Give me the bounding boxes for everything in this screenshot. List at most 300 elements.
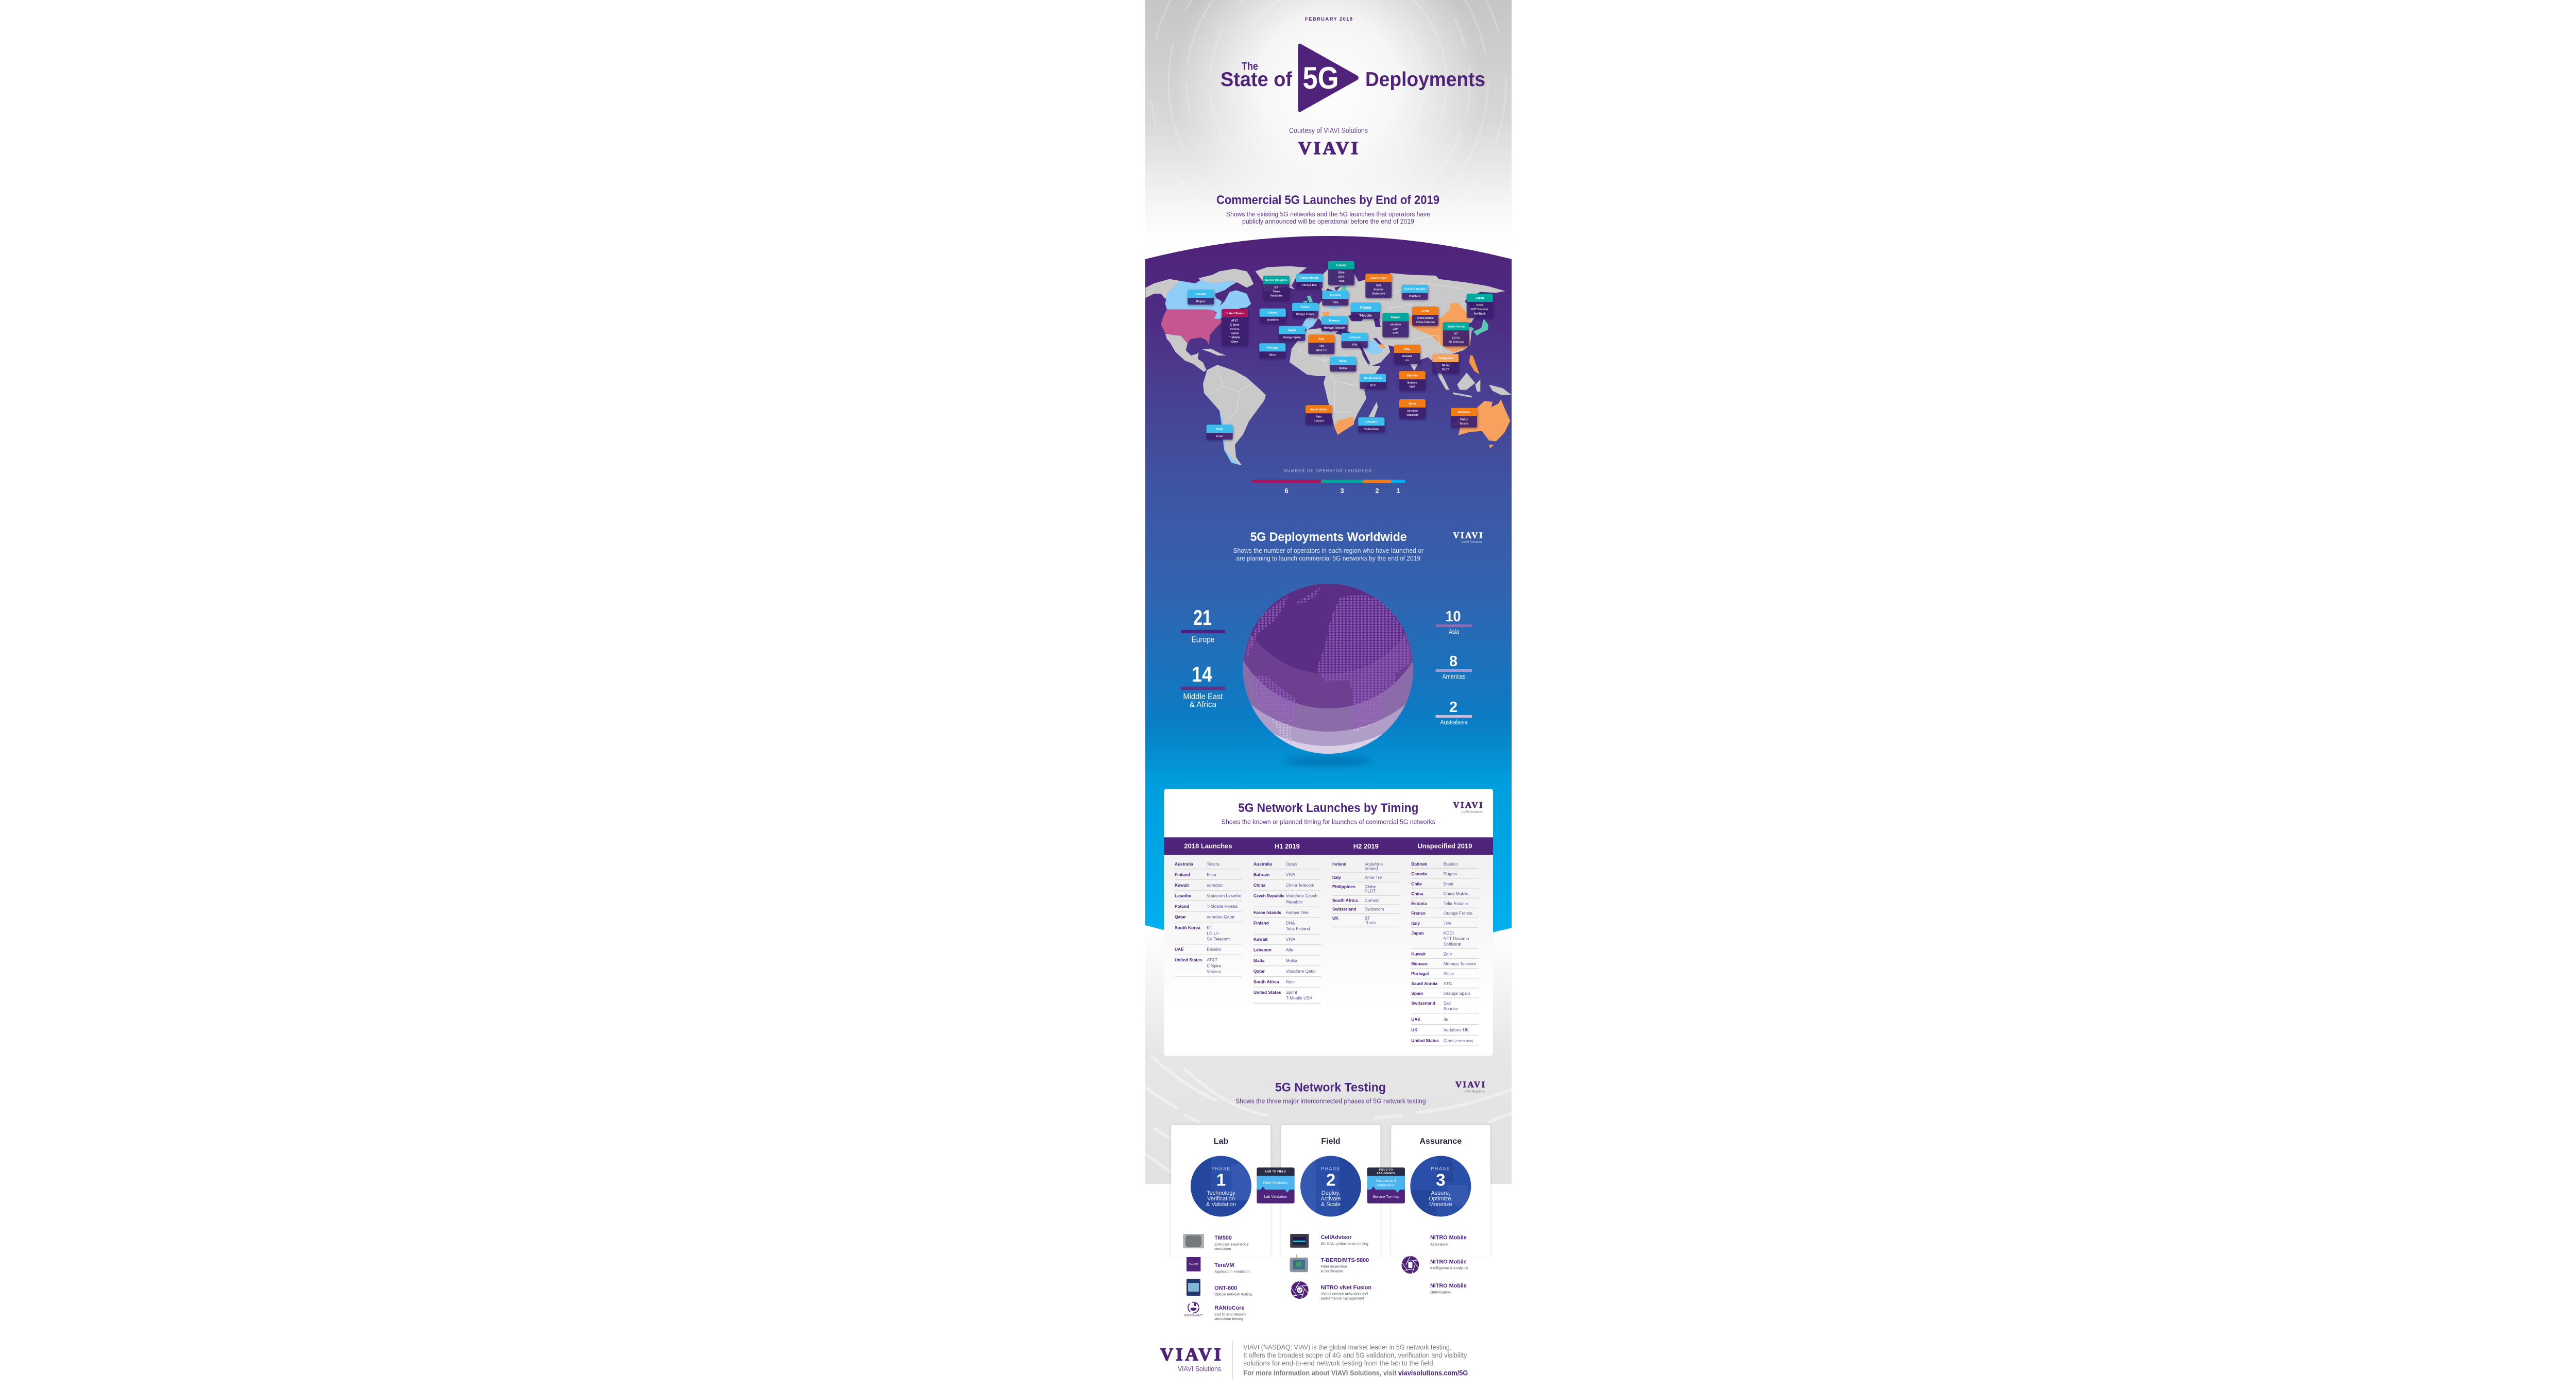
card: Japan — [1467, 294, 1493, 318]
product: NITRO vNet Fusion: performance management — [1321, 1296, 1364, 1300]
column: H2 2019: Three — [1365, 920, 1376, 925]
card: Kuwait — [1382, 313, 1409, 337]
card: Czech Republic — [1402, 285, 1428, 300]
heading: testing: 5G Network Testing — [1275, 1080, 1386, 1094]
phase 2 circle: Activate — [1320, 1196, 1341, 1202]
description: testing: Shows the three major interconnected phases of 5G network testing — [1235, 1097, 1426, 1105]
card: Ireland: Vodafone — [1267, 319, 1279, 322]
panel: lab — [1171, 1125, 1270, 1267]
card: South Korea: LG U+ — [1452, 336, 1460, 340]
column: 2018 launches: Qatar — [1175, 914, 1187, 920]
icon: TM500 device — [1183, 1234, 1204, 1248]
card: UAE: UAE — [1404, 348, 1410, 351]
column: unspecified 2019: Telia Estonia — [1444, 901, 1468, 906]
table header band: Unspecified 2019 — [1417, 842, 1472, 850]
product: TeraVM: TeraVM — [1214, 1262, 1234, 1268]
heading: Lab: Lab — [1214, 1137, 1228, 1146]
column: 2018 launches: LG U+ — [1207, 931, 1219, 936]
card: South Korea: SK Telecom — [1449, 341, 1464, 344]
phase 3 circle — [1410, 1156, 1471, 1218]
column: 2018 launches: Etisalat — [1207, 947, 1221, 952]
stat: Americas 8 — [1436, 653, 1472, 680]
date label: FEBRUARY 2019 — [1305, 16, 1352, 22]
product: RANtoCore: End to end network — [1214, 1312, 1247, 1316]
card: Poland — [1351, 302, 1380, 319]
column: unspecified 2019: Claro (Puerto Rico) — [1444, 1038, 1473, 1043]
column: H1 2019: Lebanon — [1253, 947, 1272, 953]
card: Monaco — [1321, 316, 1348, 331]
map cards — [1188, 261, 1493, 439]
column: 2018 launches: T-Mobile Polska — [1207, 904, 1238, 909]
card: Estonia — [1322, 291, 1348, 306]
card: United States: Claro — [1231, 341, 1238, 344]
stat: Europe 21: 21 — [1193, 605, 1212, 630]
card: Qatar — [1399, 399, 1426, 419]
card: Monaco: Monaco Telecom — [1324, 327, 1345, 330]
product: NITRO Mobile intelligence: NITRO Mobile — [1430, 1259, 1467, 1265]
card: Lesotho: Lesotho — [1366, 420, 1377, 423]
footer logo: VIAVI — [1160, 1345, 1221, 1365]
card: Poland: T-Mobile — [1359, 314, 1372, 317]
card: France: Orange France — [1296, 313, 1315, 316]
card: Czech Republic: Czech Republic — [1404, 288, 1426, 291]
stat: Europe 21: Europe — [1191, 636, 1215, 644]
panel: field — [1281, 1125, 1380, 1267]
column: H1 2019: Malta — [1253, 958, 1265, 963]
product: NITRO Mobile assurance: Assurance — [1430, 1242, 1448, 1246]
phase 2 circle — [1300, 1156, 1363, 1217]
card: Ireland: Ireland — [1268, 312, 1278, 315]
column: 2018 launches: Elisa — [1207, 872, 1216, 877]
product: NITRO Mobile optimization — [1430, 1283, 1467, 1295]
footer text: It offers the broadest scope of 4G and 5G validation, verification and visibility — [1243, 1351, 1467, 1359]
column: unspecified 2019: UK — [1411, 1027, 1417, 1032]
connector: field to assurance — [1367, 1167, 1405, 1203]
card: United Kingdom: BT — [1275, 286, 1278, 289]
connector: field to assurance: Automation — [1377, 1183, 1395, 1188]
table header band: 2018 Launches — [1184, 842, 1232, 850]
table header band: H1 2019 — [1275, 842, 1300, 850]
column: H1 2019: Vodafone Qatar — [1286, 969, 1316, 974]
phase 1 circle: Verification — [1207, 1196, 1235, 1202]
column: H1 2019: Kuwait — [1253, 937, 1268, 942]
column: 2018 launches: Vodacom Lesotho — [1207, 893, 1242, 899]
footer text — [1243, 1343, 1468, 1377]
card: Italy — [1308, 334, 1334, 354]
table header band: H2 2019 — [1353, 842, 1379, 850]
card: United Kingdom: Vodafone — [1270, 295, 1282, 298]
card: Poland: Poland — [1360, 306, 1371, 310]
card: France — [1292, 303, 1318, 318]
card: Saudi Arabia — [1360, 374, 1386, 389]
column: 2018 launches: Australia — [1175, 861, 1193, 867]
column: H1 2019: Føroya Tele — [1286, 910, 1309, 915]
product: T-BERD/MTS-5800: & certification — [1321, 1268, 1343, 1273]
card: United States — [1222, 309, 1248, 346]
product: T-BERD/MTS-5800: Fiber inspection — [1321, 1264, 1347, 1269]
card: Canada: Rogers — [1196, 300, 1206, 303]
globe shadow — [1284, 757, 1372, 766]
card: Estonia: Telia — [1332, 301, 1338, 304]
column: H2 2019: Swisscom — [1365, 907, 1384, 912]
product: NITRO Mobile assurance — [1430, 1235, 1467, 1246]
column: unspecified 2019: Entel — [1444, 881, 1453, 886]
column: 2018 launches: ooredoo Qatar — [1207, 914, 1235, 920]
column: H1 2019: Bahrain — [1253, 872, 1269, 877]
column: unspecified 2019: Italy — [1411, 921, 1420, 926]
card: United States: C Spire — [1230, 324, 1240, 327]
stat: Asia 10 — [1436, 608, 1472, 636]
column: unspecified 2019: du — [1444, 1017, 1448, 1022]
card: Spain: Spain — [1288, 329, 1296, 332]
card: Philippines: PLDT — [1442, 368, 1449, 371]
legend: number of operator launches — [1251, 469, 1405, 495]
column: 2018 launches: Lesotho — [1175, 893, 1192, 899]
product: CellAdvisor: CellAdvisor — [1321, 1234, 1352, 1241]
card: Canada: Canada — [1195, 293, 1206, 296]
globe chart — [1243, 584, 1413, 754]
product: TM500: End-user experience — [1214, 1242, 1249, 1246]
card: Kuwait: Kuwait — [1391, 316, 1400, 319]
column: H2 2019: Wind Tre — [1365, 875, 1382, 880]
column: 2018 launches — [1175, 861, 1242, 977]
phase 3 circle: Assure, — [1431, 1190, 1450, 1196]
column: unspecified 2019 — [1411, 861, 1479, 1046]
card: Australia: Telstra — [1460, 422, 1468, 426]
card: UAE — [1394, 345, 1420, 364]
legend: number of operator launches: 3 — [1340, 487, 1344, 495]
column: 2018 launches: Poland — [1175, 904, 1189, 909]
heading: timing: 5G Network Launches by Timing — [1238, 801, 1418, 815]
column: 2018 launches: KT — [1207, 925, 1212, 930]
card: Switzerland: Swisscom — [1372, 293, 1385, 296]
column: H1 2019: South Africa — [1253, 979, 1279, 984]
column: H1 2019: T-Mobile USA — [1286, 995, 1313, 1001]
column: unspecified 2019: Bahrain — [1411, 861, 1427, 867]
card: South Korea — [1443, 322, 1469, 346]
column: unspecified 2019: Estonia — [1411, 901, 1427, 906]
product: RANtoCore: simulation testing — [1214, 1316, 1243, 1321]
icon: TeraVM box: TeraVM — [1189, 1263, 1198, 1266]
icon: CellAdvisor device — [1290, 1234, 1309, 1248]
table body background — [1164, 855, 1493, 1056]
product: CellAdvisor: 5G RAN performance testing — [1321, 1242, 1368, 1246]
phase 1 circle: & Validation — [1206, 1201, 1236, 1208]
column: H1 2019: China — [1253, 883, 1266, 888]
heading: commercial launches: Commercial 5G Launches by End of 2019 — [1216, 193, 1439, 207]
card: UAE: du — [1405, 359, 1409, 362]
connector: lab to field: Lab Validation — [1264, 1194, 1287, 1199]
phase 1 circle: Technology — [1207, 1190, 1235, 1196]
phase 2 circle: 2 — [1326, 1171, 1335, 1190]
card: Lebanon — [1342, 333, 1368, 348]
column: 2018 launches: Kuwait — [1175, 883, 1189, 888]
card: Kuwait: Zain — [1393, 328, 1398, 331]
product: ONT-600: ONT-600 — [1214, 1285, 1237, 1291]
VIAVI logo: VIAVI Solutions — [1464, 1091, 1485, 1094]
column: unspecified 2019: Sunrise — [1444, 1006, 1458, 1011]
column: 2018 launches: AT&T — [1207, 957, 1217, 962]
connector: field to assurance: Assurance & — [1376, 1178, 1397, 1183]
product: NITRO Mobile intelligence: Intelligence & Analytics — [1430, 1266, 1468, 1270]
product: TeraVM: Application emulation — [1214, 1269, 1250, 1274]
card: Australia: Optus — [1460, 418, 1468, 421]
card: Malta — [1330, 357, 1356, 371]
card: South Africa: Rain — [1316, 415, 1321, 418]
stat: Australasia 2 — [1436, 699, 1472, 726]
column: 2018 launches: UAE — [1175, 947, 1184, 952]
column: unspecified 2019: Vodafone UK — [1444, 1027, 1469, 1032]
column: H2 2019: Ireland — [1365, 866, 1378, 871]
VIAVI logo white: VIAVI — [1453, 531, 1483, 540]
card: South Korea: KT — [1454, 332, 1458, 335]
stat: Europe 21 — [1181, 605, 1225, 644]
product: NITRO Mobile intelligence — [1401, 1256, 1468, 1274]
connector: lab to field — [1257, 1167, 1295, 1203]
column: H2 2019 — [1332, 861, 1400, 927]
heading: Field: Field — [1321, 1137, 1341, 1146]
card: Philippines: Globe — [1442, 364, 1449, 367]
card: France: France — [1300, 306, 1310, 309]
card: Italy: Italy — [1318, 337, 1325, 341]
phase 1 circle: PHASE — [1211, 1166, 1231, 1172]
column: unspecified 2019: TIM — [1444, 921, 1451, 926]
card: Switzerland: Salt — [1376, 284, 1381, 287]
product: NITRO Mobile assurance: NITRO Mobile — [1430, 1235, 1467, 1241]
card: Portugal — [1259, 343, 1285, 358]
product: CellAdvisor — [1290, 1234, 1368, 1248]
column: unspecified 2019: SoftBank — [1444, 941, 1461, 946]
card: Philippines — [1432, 354, 1459, 374]
card: Spain: Orange Spain — [1283, 336, 1301, 340]
phase 2 circle: Deploy, — [1321, 1190, 1340, 1196]
column: unspecified 2019: Orange France — [1444, 911, 1472, 916]
product: T-BERD/MTS-5800 — [1290, 1255, 1369, 1273]
phase 3 circle: Monetize — [1429, 1201, 1452, 1208]
column: H1 2019: Finland — [1253, 921, 1269, 926]
card: Finland: Telia — [1338, 280, 1344, 283]
card: Czech Republic: Vodafone — [1409, 295, 1421, 298]
description: timing: Shows the known or planned timing for launches of commercial 5G networks — [1222, 818, 1435, 825]
card: South Korea: South Korea — [1448, 325, 1465, 328]
column: H1 2019: Czech Republic — [1253, 893, 1284, 899]
description: commercial launches: Shows the existing 5G networks and the 5G launches that operators have — [1226, 210, 1430, 218]
phase 3 circle: PHASE — [1431, 1166, 1450, 1172]
column: 2018 launches: Finland — [1175, 872, 1190, 877]
icon: NITRO aperture — [1291, 1281, 1309, 1299]
world map — [1145, 263, 1512, 465]
product: ONT-600: Optical network testing — [1214, 1292, 1252, 1297]
card: Qatar: Qatar — [1409, 402, 1417, 405]
card: United States: AT&T — [1231, 319, 1239, 323]
product: RANtoCore — [1184, 1302, 1247, 1321]
product: NITRO vNet Fusion: NITRO vNet Fusion — [1321, 1284, 1371, 1291]
card: Finland: Finland — [1336, 264, 1347, 267]
column: 2018 launches: ooredoo — [1207, 883, 1223, 888]
card: Australia: Australia — [1458, 411, 1470, 414]
stat: Middle East and Africa 14: 14 — [1192, 662, 1213, 686]
column: unspecified 2019: Spain — [1411, 991, 1423, 996]
description: commercial launches: publicly announced will be operational before the end of 2019 — [1242, 217, 1414, 225]
header background — [1145, 0, 1512, 209]
card: Switzerland — [1365, 274, 1392, 298]
column: H2 2019: Globe — [1365, 884, 1376, 889]
connector: field to assurance: FIELD TO — [1379, 1169, 1393, 1172]
card: Kuwait: VIVA — [1393, 332, 1399, 335]
card: Monaco: Monaco — [1329, 319, 1340, 323]
stat: Australasia 2: Australasia — [1440, 718, 1468, 726]
card: United Kingdom: Three — [1273, 290, 1280, 293]
card: Lebanon: Lebanon — [1349, 336, 1361, 339]
card: Japan: KDDI — [1477, 304, 1483, 307]
card: United States: Sprint — [1231, 332, 1239, 335]
icon: RANtoCore: RANtoCore™ — [1184, 1314, 1203, 1317]
connector: field to assurance: Service Turn-Up — [1372, 1194, 1399, 1199]
column: H1 2019: VIVA — [1286, 872, 1296, 877]
card: China: China Telecom — [1416, 321, 1435, 324]
connector: field to assurance: ASSURANCE — [1377, 1172, 1396, 1175]
column: unspecified 2019: United States — [1411, 1038, 1439, 1043]
column: unspecified 2019: Chile — [1411, 881, 1422, 886]
card: Bahrain — [1399, 371, 1426, 391]
icon: T-BERD device — [1290, 1255, 1308, 1272]
heading: worldwide: 5G Deployments Worldwide — [1250, 530, 1407, 544]
column: unspecified 2019: Orange Spain — [1444, 991, 1470, 996]
connector: lab to field: Field Validation — [1263, 1180, 1288, 1185]
column: H1 2019: Telia Finland — [1286, 926, 1310, 931]
legend: number of operator launches: 1 — [1396, 487, 1400, 495]
card: Portugal: Portugal — [1266, 346, 1279, 349]
card: United Kingdom: United Kingdom — [1265, 279, 1287, 282]
product: T-BERD/MTS-5800: T-BERD/MTS-5800 — [1321, 1257, 1369, 1263]
column: H1 2019: Sprint — [1286, 990, 1297, 995]
legend: number of operator launches: NUMBER OF OPERATOR LAUNCHES: — [1284, 469, 1373, 473]
stat: Americas 8: 8 — [1449, 653, 1458, 670]
column: 2018 launches: South Korea — [1175, 925, 1200, 930]
phase 2 circle: PHASE — [1321, 1166, 1341, 1172]
product: NITRO Mobile optimization: Optimization — [1430, 1290, 1451, 1295]
title: The — [1242, 61, 1258, 72]
VIAVI logo: VIAVI Solutions — [1461, 811, 1483, 814]
card: Italy: Wind Tre — [1316, 349, 1327, 352]
stat: Middle East and Africa 14: & Africa — [1190, 701, 1216, 709]
card: Malta: Malta — [1340, 360, 1347, 363]
title: Deployments — [1365, 69, 1485, 91]
column: 2018 launches: United States — [1175, 957, 1202, 962]
column: H2 2019: UK — [1332, 916, 1338, 921]
card: South Africa: South Africa — [1310, 408, 1328, 411]
legend: number of operator launches: 2 — [1375, 487, 1379, 495]
card: United States: T-Mobile — [1229, 336, 1240, 340]
title: 5G — [1302, 61, 1338, 95]
stat: Australasia 2: 2 — [1449, 699, 1458, 716]
card: Lesotho — [1358, 417, 1384, 432]
column: H1 2019: Faroe Islands — [1253, 910, 1281, 915]
column: 2018 launches: C Spire — [1207, 963, 1222, 968]
footer text: solutions for end-to-end network testing from the lab to the field. — [1243, 1359, 1435, 1367]
background streaks — [1145, 1056, 1512, 1172]
card: Chile: Entel — [1216, 435, 1223, 438]
card: Malta: Melita — [1339, 367, 1347, 370]
stat: Middle East and Africa 14: Middle East — [1183, 692, 1223, 701]
product: ONT-600 — [1187, 1279, 1252, 1297]
card: Finland — [1328, 261, 1354, 285]
column: unspecified 2019: Rogers — [1444, 871, 1458, 876]
column: unspecified 2019: Monaco — [1411, 961, 1428, 967]
footer divider — [1232, 1341, 1233, 1379]
card: Kuwait: ooredoo — [1390, 324, 1401, 327]
card: Chile: Chile — [1216, 428, 1223, 431]
card: Switzerland: Sunrise — [1374, 288, 1383, 291]
product: TM500 — [1183, 1234, 1249, 1251]
product: NITRO Mobile optimization: NITRO Mobile — [1430, 1283, 1467, 1289]
column: H2 2019: Ireland — [1332, 861, 1346, 867]
footer text: For more information about VIAVI Solutions, visit viavisolutions.com/5G — [1243, 1368, 1468, 1377]
column: unspecified 2019: KDDI — [1444, 930, 1454, 936]
column: H1 2019: DNA — [1286, 921, 1295, 926]
description: commercial launches — [1226, 210, 1430, 225]
legend: number of operator launches: 6 — [1284, 487, 1289, 495]
product: TeraVM — [1187, 1257, 1250, 1274]
column: unspecified 2019: Switzerland — [1411, 1001, 1435, 1006]
card: South Africa — [1306, 405, 1332, 425]
courtesy line: Courtesy of VIAVI Solutions — [1289, 126, 1368, 135]
column: H2 2019: Vodafone — [1365, 861, 1383, 867]
card: Ireland — [1260, 309, 1286, 324]
card: Chile — [1207, 425, 1233, 439]
column: unspecified 2019: Japan — [1411, 930, 1424, 936]
description: worldwide — [1233, 547, 1424, 562]
phase 1 circle — [1191, 1156, 1252, 1217]
icon: NITRO mobile aperture — [1401, 1256, 1419, 1274]
column: H2 2019: BT — [1365, 916, 1370, 921]
column: unspecified 2019: France — [1411, 911, 1426, 916]
card: Qatar: Vodafone — [1406, 414, 1418, 417]
column: H1 2019: China Telecom — [1286, 883, 1314, 888]
card: China — [1412, 307, 1438, 326]
panel: assurance — [1391, 1125, 1490, 1267]
phase 3 circle: Optimize, — [1429, 1196, 1453, 1202]
stat: Asia 10: 10 — [1446, 608, 1461, 625]
card: Estonia: Estonia — [1330, 294, 1341, 297]
column: unspecified 2019: Saudi Arabia — [1411, 981, 1438, 986]
card: China: China — [1421, 310, 1430, 313]
card: Faroe Islands — [1296, 274, 1323, 289]
card: Bahrain: Batelco — [1408, 381, 1417, 384]
product: NITRO vNet Fusion: Virtual service activation and — [1321, 1292, 1368, 1296]
card: Spain — [1279, 326, 1305, 341]
product: RANtoCore: RANtoCore — [1214, 1305, 1244, 1311]
column: H1 2019: United States — [1253, 990, 1281, 995]
column: 2018 launches: Telstra — [1207, 861, 1219, 867]
column: H1 2019: Rain — [1286, 979, 1295, 984]
card: Qatar: ooredoo — [1407, 410, 1418, 413]
column: H2 2019: South Africa — [1332, 897, 1358, 903]
panel: launches by timing — [1164, 789, 1493, 1056]
column: H2 2019: Italy — [1332, 875, 1341, 880]
card: Saudi Arabia: Saudi Arabia — [1364, 377, 1382, 380]
column: H2 2019: Philippines — [1332, 884, 1355, 889]
column: H1 2019: Melita — [1286, 958, 1297, 963]
column: H1 2019: Optus — [1286, 861, 1297, 867]
VIAVI logo: VIAVI — [1453, 800, 1483, 810]
card: United States: United States — [1226, 312, 1244, 315]
icon: ONT-600 device — [1187, 1279, 1200, 1296]
column: unspecified 2019: Canada — [1411, 871, 1427, 876]
card: Finland: DNA — [1338, 276, 1344, 279]
column: H1 2019: VIVA — [1286, 937, 1296, 942]
column: unspecified 2019: Portugal — [1411, 971, 1429, 976]
